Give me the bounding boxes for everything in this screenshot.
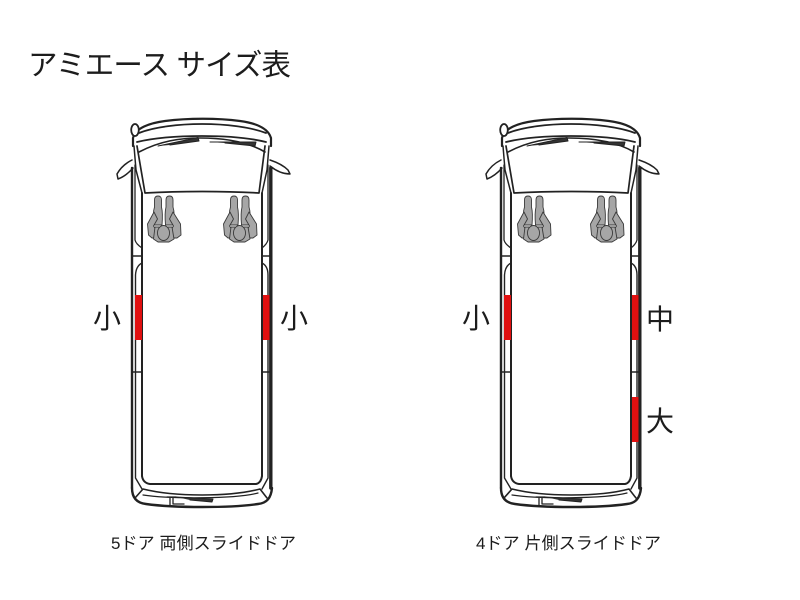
red marker: right door medium xyxy=(632,295,638,340)
size label: left small: 小 xyxy=(93,303,121,334)
size label: right small: 小 xyxy=(280,303,308,334)
size label: right medium: 中 xyxy=(646,304,674,335)
panel: 4-door van diagram xyxy=(462,119,674,553)
red marker: left door small xyxy=(135,295,142,340)
size label: right large: 大 xyxy=(646,406,674,437)
icon: driver seat occupants, right xyxy=(224,196,257,242)
caption: 5-door: 5ドア 両側スライドドア xyxy=(111,534,296,553)
icon: driver seat occupants, right xyxy=(590,196,624,242)
red marker: left door small xyxy=(504,295,511,340)
red marker: right door small xyxy=(263,295,270,340)
van outline: 4-door xyxy=(486,119,659,507)
red marker: right door large xyxy=(632,397,638,442)
van outline: 5-door xyxy=(117,119,290,507)
icon: driver seat occupants, left xyxy=(148,196,181,242)
caption: 4-door: 4ドア 片側スライドドア xyxy=(476,534,661,553)
panel: 5-door van diagram xyxy=(93,119,308,553)
icon: driver seat occupants, left xyxy=(518,196,551,242)
size label: left small: 小 xyxy=(462,303,490,334)
title: アミエース サイズ表 xyxy=(28,49,291,82)
